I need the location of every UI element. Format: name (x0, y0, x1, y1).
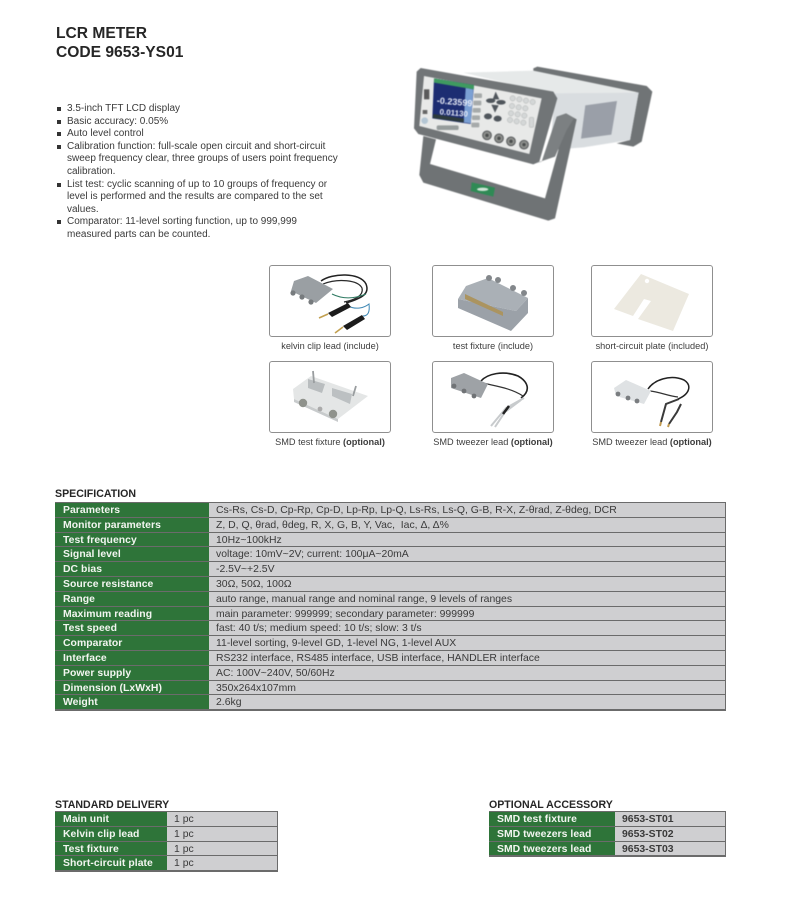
caption: SMD tweezer lead 2: SMD tweezer lead (optional) (592, 437, 712, 447)
feature list: Auto level control (67, 128, 144, 139)
specification table: Z, D, Q, θrad, θdeg, R, X, G, B, Y, Vac, Iac, Δ, Δ% (216, 520, 449, 531)
specification table: Test frequency (63, 535, 137, 546)
feature list: Calibration function: full-scale open circuit and short-circuit sweep frequency clear, three groups of users point frequency calibration. (67, 141, 338, 177)
specification table: Monitor parameters (63, 520, 161, 531)
standard delivery table: Test fixture (63, 844, 119, 855)
specification table: Comparator (63, 638, 122, 649)
standard delivery table: 1 pc (174, 858, 194, 869)
specification table: Source resistance (63, 579, 153, 590)
specification table: 2.6kg (216, 697, 242, 708)
product photo: LCR meter: -0.23599 (436, 95, 473, 108)
specification table: 10Hz~100kHz (216, 535, 282, 546)
product photo: LCR meter (413, 66, 653, 222)
optional accessory table: SMD tweezers lead (497, 844, 591, 855)
title: CODE 9653-YS01 (56, 44, 183, 61)
feature list: Basic accuracy: 0.05% (67, 116, 168, 127)
standard delivery table: 1 pc (174, 829, 194, 840)
title: LCR METER (56, 25, 147, 42)
accessory: test fixture (432, 265, 554, 337)
accessory: SMD tweezer lead 2 (591, 361, 713, 433)
standard delivery table: Main unit (63, 814, 109, 825)
specification table: AC: 100V~240V, 50/60Hz (216, 668, 335, 679)
standard delivery table: 1 pc (174, 844, 194, 855)
specification table: Range (63, 594, 95, 605)
accessory: short-circuit plate (591, 265, 713, 337)
heading: specification: SPECIFICATION (55, 488, 136, 500)
feature list (57, 103, 338, 240)
specification table: Interface (63, 653, 107, 664)
specification table: DC bias (63, 564, 102, 575)
specification table: RS232 interface, RS485 interface, USB interface, HANDLER interface (216, 653, 540, 664)
specification table: 350x264x107mm (216, 683, 296, 694)
caption: kelvin clip lead: kelvin clip lead (include) (281, 341, 379, 351)
standard delivery table: Short-circuit plate (63, 858, 153, 869)
specification table: 11-level sorting, 9-level GD, 1-level NG, 1-level AUX (216, 638, 456, 649)
specification table: Maximum reading (63, 609, 152, 620)
specification table: main parameter: 999999; secondary parameter: 999999 (216, 609, 474, 620)
caption: short-circuit plate: short-circuit plate (included) (596, 341, 708, 351)
optional accessory table: SMD tweezers lead (497, 829, 591, 840)
specification table: 30Ω, 50Ω, 100Ω (216, 579, 292, 590)
specification table: Dimension (LxWxH) (63, 683, 162, 694)
standard delivery table (55, 811, 278, 872)
heading: standard delivery: STANDARD DELIVERY (55, 799, 169, 811)
specification table: Parameters (63, 505, 120, 516)
caption: test fixture: test fixture (include) (453, 341, 533, 351)
specification table: auto range, manual range and nominal range, 9 levels of ranges (216, 594, 512, 605)
feature list: Comparator: 11-level sorting function, up to 999,999 measured parts can be counted. (67, 216, 297, 240)
optional accessory table: 9653-ST01 (622, 814, 674, 825)
specification table: fast: 40 t/s; medium speed: 10 t/s; slow: 3 t/s (216, 623, 422, 634)
feature list: List test: cyclic scanning of up to 10 groups of frequency or level is performed and the results are compared to the set values. (67, 179, 327, 215)
specification table: Test speed (63, 623, 117, 634)
heading: optional accessory: OPTIONAL ACCESSORY (489, 799, 613, 811)
standard delivery table: Kelvin clip lead (63, 829, 139, 840)
caption: SMD test fixture: SMD test fixture (optional) (275, 437, 385, 447)
accessory: SMD test fixture (269, 361, 391, 433)
optional accessory table (489, 811, 726, 857)
specification table: Signal level (63, 549, 121, 560)
caption: SMD tweezer lead: SMD tweezer lead (optional) (433, 437, 553, 447)
specification table: Weight (63, 697, 98, 708)
specification table: voltage: 10mV~2V; current: 100μA~20mA (216, 549, 409, 560)
optional accessory table: 9653-ST03 (622, 844, 674, 855)
accessory: kelvin clip lead (269, 265, 391, 337)
product photo: LCR meter: 0.01130 (439, 107, 469, 119)
optional accessory table: 9653-ST02 (622, 829, 674, 840)
feature list: 3.5-inch TFT LCD display (67, 103, 180, 114)
specification table: -2.5V~+2.5V (216, 564, 275, 575)
specification table: Cs-Rs, Cs-D, Cp-Rp, Cp-D, Lp-Rp, Lp-Q, Ls-Rs, Ls-Q, G-B, R-X, Z-θrad, Z-θdeg, DCR (216, 505, 617, 516)
optional accessory table: SMD test fixture (497, 814, 577, 825)
title (56, 25, 183, 61)
accessory: SMD tweezer lead (432, 361, 554, 433)
standard delivery table: 1 pc (174, 814, 194, 825)
specification table (55, 502, 726, 711)
specification table: Power supply (63, 668, 131, 679)
